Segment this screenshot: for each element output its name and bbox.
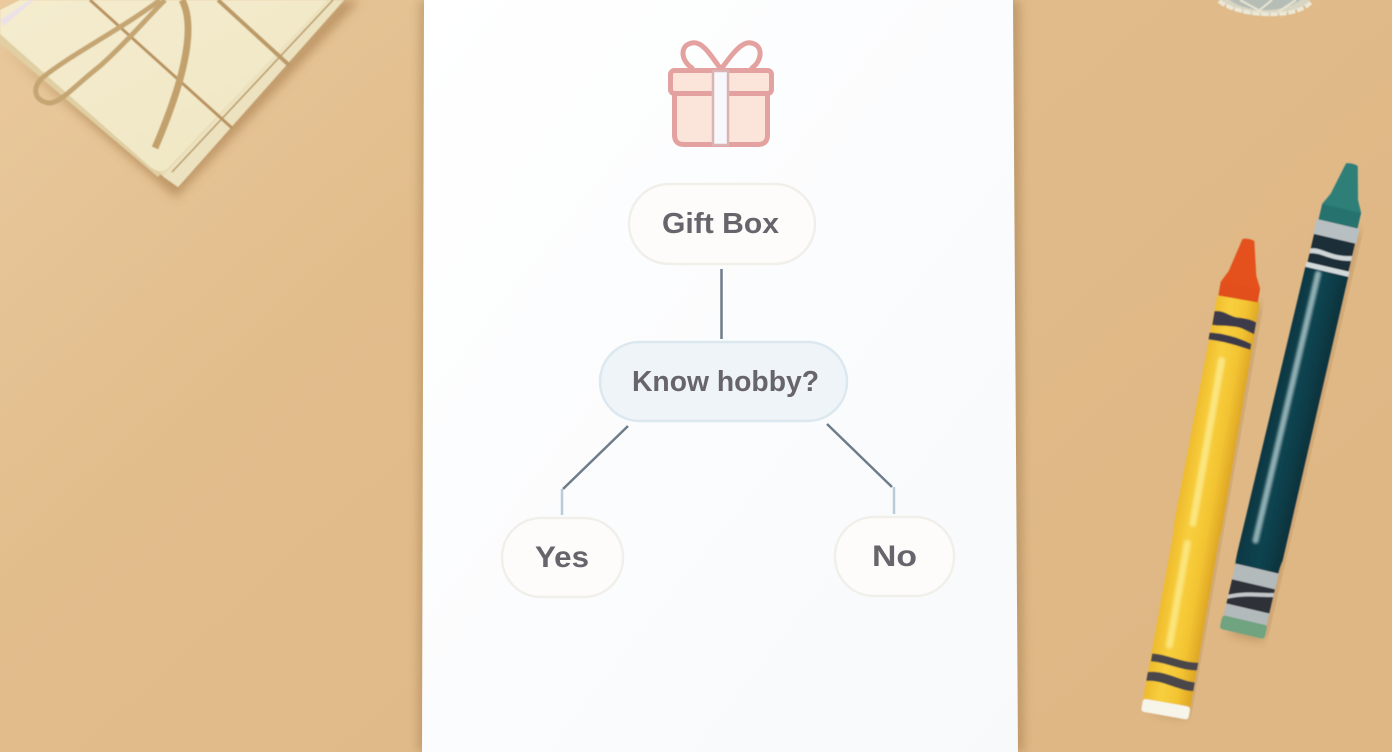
paper sheet shadow [418,0,1024,752]
icon: gift box [670,43,772,145]
decorative glass dish, top right [1216,0,1314,16]
node: Gift Box: Gift Box [662,208,779,240]
node: Know hobby?: Know hobby? [632,366,819,398]
connector: Know hobby to No [827,424,894,514]
node: Yes [502,518,623,597]
node: No: No [872,540,917,573]
paper sheet [422,0,1018,752]
wrapped gift package, top left [0,0,360,198]
connector: Gift Box to Know hobby [720,269,723,339]
crayon: yellow with orange tip [1141,235,1272,720]
node: No [835,517,954,596]
node: Know hobby? [600,342,847,421]
node: Yes: Yes [535,541,589,574]
connector: Know hobby to Yes [562,426,628,515]
crayon: teal [1219,158,1376,642]
node: Gift Box [629,184,815,264]
